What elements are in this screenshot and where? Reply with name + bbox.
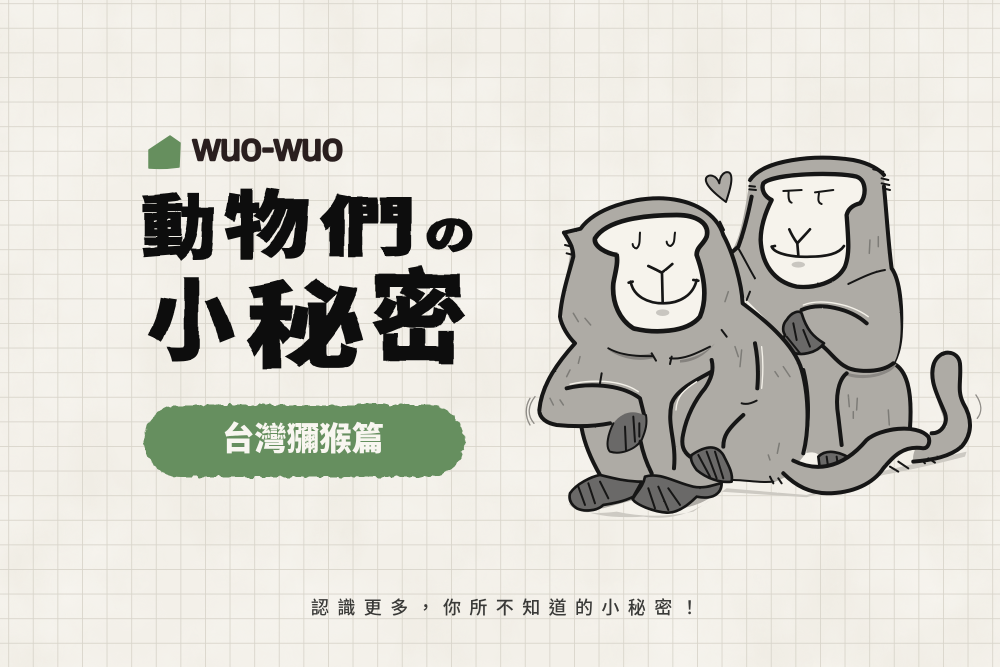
left monkey (539, 198, 935, 513)
right monkey body fur (730, 158, 911, 465)
title: 動物們の小秘密: 物 (224, 186, 310, 269)
logo wordmark: wuo-wuo (192, 127, 343, 169)
right monkey (730, 158, 970, 470)
title: 動物們の小秘密: 秘 (245, 275, 365, 380)
title: 動物們の小秘密 (141, 186, 475, 380)
banner pill (144, 405, 464, 477)
right monkey face (761, 174, 865, 287)
left monkey outline (564, 198, 808, 453)
left monkey legs (670, 372, 712, 468)
right monkey leg (837, 373, 847, 445)
icon: heart (706, 172, 731, 202)
illustration: two Formosan macaques (526, 158, 981, 518)
left monkey arm hand (607, 412, 647, 453)
left monkey tail (783, 429, 929, 493)
right monkey foot (798, 451, 853, 470)
ground shadow (568, 452, 967, 518)
left monkey collar shadow (608, 343, 715, 363)
left monkey feet (570, 475, 642, 510)
left monkey body fur (540, 198, 808, 509)
title: 動物們の小秘密: 動 (141, 190, 217, 267)
left monkey face (595, 215, 707, 331)
right monkey arm (803, 271, 901, 371)
right monkey hand (783, 312, 824, 354)
title: 動物們の小秘密: 密 (370, 263, 466, 376)
icon: green house (149, 136, 180, 168)
right monkey tail (913, 353, 970, 462)
title: 動物們の小秘密: の (425, 212, 475, 259)
banner text: 台灣獼猴篇 (222, 420, 384, 457)
title: 動物們の小秘密: 們 (319, 191, 416, 264)
left monkey nose and smile (629, 264, 698, 303)
left monkey bottom line (733, 477, 782, 483)
left monkey eyes (633, 233, 675, 248)
logo: wuo-wuo (149, 127, 343, 169)
title: 動物們の小秘密: 小 (147, 272, 235, 371)
left monkey chest lines (608, 330, 727, 364)
pill background (144, 405, 464, 477)
left monkey arm (567, 385, 645, 418)
left monkey knee hand (691, 447, 732, 482)
right monkey nose and smile (772, 229, 844, 257)
tagline: 認識更多，你所不知道的小秘密！ (311, 598, 707, 618)
right monkey eyes and brows (783, 190, 833, 204)
motion lines (526, 395, 981, 425)
